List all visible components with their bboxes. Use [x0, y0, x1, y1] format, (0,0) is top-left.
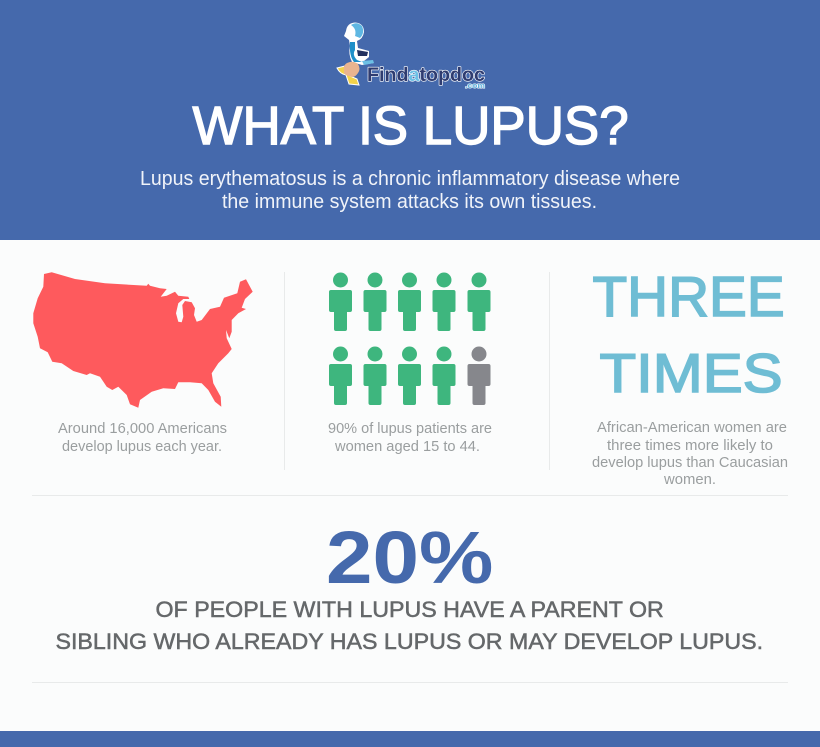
caption: African-American women: [592, 420, 788, 488]
statistic text: SIBLING WHO ALREADY HAS LUPUS OR MAY DEVELOP LUPUS.: [56, 630, 763, 654]
caption: 90% of patients: [328, 421, 492, 455]
pictogram: nine of ten people: [329, 272, 490, 405]
caption: African-American women: women.: [663, 472, 716, 488]
wordmark: Findatopdoc: [367, 65, 485, 86]
caption: 90% of patients: women aged 15 to 44.: [334, 439, 480, 455]
person 3: [398, 272, 421, 331]
caption: 90% of patients: 90% of lupus patients are: [328, 421, 492, 437]
panel: map statistic: [33, 272, 253, 455]
title: WHAT IS LUPUS?: [192, 97, 629, 156]
statistic text: OF PEOPLE WITH LUPUS HAVE A PARENT OR: [156, 598, 664, 622]
caption: 16,000 Americans: develop lupus each year.: [62, 439, 222, 455]
panel: header: [0, 0, 820, 240]
person 10, grey: [468, 346, 490, 405]
icon: US map: [33, 272, 253, 408]
headline: three times: [592, 266, 785, 404]
caption: 16,000 Americans: [58, 421, 227, 455]
caption: 16,000 Americans: Around 16,000 Americans: [58, 421, 227, 437]
person 7: [364, 346, 386, 405]
footer band: [0, 731, 820, 747]
person 8: [398, 346, 421, 405]
subtitle: Lupus erythematosus is a chronic inflammatory disease where: [140, 168, 680, 190]
caption: African-American women: develop lupus than Caucasian: [592, 455, 788, 471]
person 4: [432, 272, 456, 331]
logo: Findatopdoc: [337, 22, 485, 90]
person 1: [329, 272, 352, 331]
person 5: [468, 272, 490, 331]
caption: African-American women: three times more likely to: [607, 438, 773, 454]
person 6: [329, 346, 352, 405]
person 9: [432, 346, 456, 405]
headline: three times: TIMES: [600, 343, 783, 404]
panel: 20 percent statistic: [56, 516, 763, 654]
panel: people pictogram: [328, 272, 492, 455]
subtitle: the immune system attacks its own tissues.: [222, 191, 597, 213]
big number: 20%: [326, 516, 493, 599]
person 2: [364, 272, 386, 331]
subtitle: [140, 168, 680, 213]
statistic text: [56, 598, 763, 654]
wordmark suffix: .com: [465, 83, 485, 90]
headline: three times: THREE: [592, 266, 785, 329]
panel: three times: [592, 266, 788, 488]
caption: African-American women: African-American women are: [597, 420, 787, 436]
icon: duck mascot: [337, 22, 374, 85]
